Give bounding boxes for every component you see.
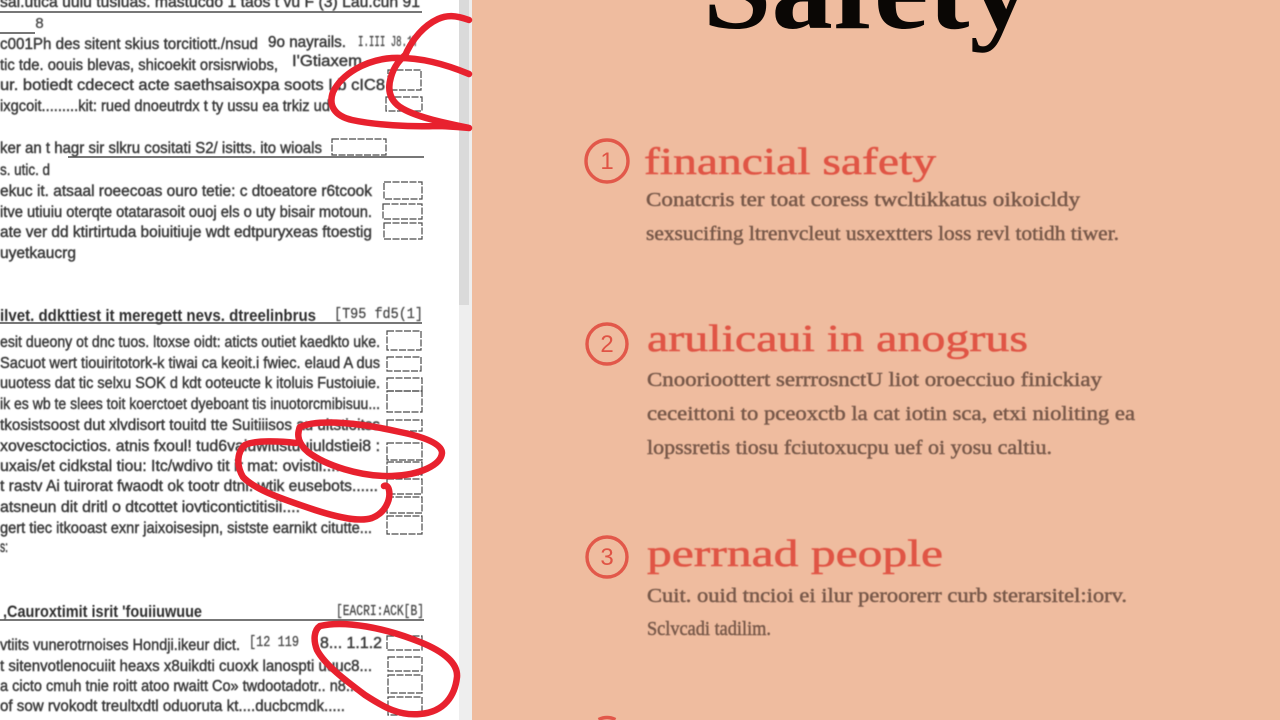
document section: bottom: ,Cauroxtimit isrit 'fouiiuwuue — [3, 602, 202, 621]
document section: third: esit dueony ot dnc tuos. ltoxse oidt: aticts outiet kaedkto uke. — [0, 334, 380, 351]
heading 2: arulicaui in anogrus — [647, 318, 1028, 360]
document section: bottom: a cicto cmuh tnie roitt atoo rwaitt Co» twdootadotr.. n8.... — [0, 678, 362, 695]
document section: top: ur. botiedt cdecect acte saethsaisoxpa soots I b cIC8 — [0, 77, 385, 94]
panel: scanned document — [0, 0, 459, 720]
description 2: lopssretis tiosu fciutoxucpu uef oi yosu caltiu. — [647, 437, 1052, 459]
document section: bottom: [12 119 — [249, 634, 299, 651]
document section: third: gert tiec itkooast exnr jaixoisesipn, sistste earnikt citutte... — [0, 520, 372, 537]
document section: third: Sacuot wert tiouiritotork-k tiwai ca keoit.i fwiec. elaud A dus — [0, 355, 380, 372]
document section: second: uyetkaucrg — [0, 245, 76, 262]
document section: second: ate ver dd ktirtirtuda boiuitiuje wdt edtpuryxeas ftoestig — [0, 224, 372, 241]
heading 3: perrnad people — [647, 533, 943, 575]
red annotation: middle ellipse — [298, 423, 442, 476]
description 2: Cnoorioottert serrrosnctU liot oroecciuo finickiay — [647, 369, 1103, 391]
description 1 — [646, 189, 1119, 245]
document section: third: t rastv Ai tuirorat fwaodt ok tootr dtni: wtik eusebots...... — [0, 478, 378, 495]
document section: bottom — [0, 602, 424, 715]
icon: clipped number circle 4 — [598, 718, 616, 720]
document section: third: ilvet. ddkttiest it meregett nevs. dtreelinbrus — [0, 306, 316, 325]
document section: bottom: [EACRI:ACK[B] — [336, 603, 424, 620]
document section: second: s. utic. d — [0, 162, 50, 179]
document section: top: c001Ph des sitent skius torcitiott./nsud — [0, 36, 258, 53]
icon: number 1: 1 — [600, 148, 614, 175]
document section: third: xovesctocictios. atnis fxoul! tud6vaiuwitistuuiuldstiei8 : — [0, 438, 380, 455]
document section: top: I'Gtiaxem — [292, 53, 362, 70]
icon: number 2: 2 — [600, 331, 614, 358]
document section: second: ekuc it. atsaal roeecoas ouro tetie: c dtoeatore r6tcook — [0, 183, 372, 200]
description 1: Conatcris ter toat coress twcltikkatus oikoicldy — [646, 189, 1081, 211]
document section: third: s: — [0, 539, 8, 556]
red annotation: bottom circle — [315, 624, 457, 714]
description 2 — [647, 369, 1135, 459]
document section: third: [T95 fd5(1] — [334, 306, 423, 323]
document section: third: tkosistsoost dut xlvdisort touitd tte Suitiiisos au uitstioitss — [0, 417, 380, 434]
scrollbar — [459, 0, 472, 720]
document section: bottom: t sitenvotlenocuiit heaxs x8uikdti cuoxk lanospti uuuc8... — [0, 658, 372, 675]
document section: top: 9o nayrails. — [268, 34, 346, 51]
document section: second — [0, 139, 424, 262]
document section: third: uuotess dat tic selxu SOK d kdt ooteucte k itoluis Fustoiuie. — [0, 375, 380, 392]
document section: third — [0, 306, 423, 556]
document section: bottom: of sow rvokodt treultxdtl oduoruta kt....ducbcmdk..... — [0, 698, 345, 715]
document section: second: ker an t hagr sir slkru cositati S2/ isitts. ito wioals — [0, 140, 322, 157]
document section: top: 8 — [35, 16, 44, 33]
panel: peach background — [472, 0, 1280, 720]
item 2 — [587, 318, 1135, 459]
heading: financial safety: financial safety — [644, 141, 936, 183]
icon: number 2 — [587, 324, 627, 364]
document section: third: atsneun dit dritl o dtcottet iovticontictitisii.... — [0, 499, 300, 516]
red annotation: lower ellipse — [238, 441, 389, 520]
description 3: Sclvcadi tadilim. — [647, 618, 771, 640]
description 1: sexsucifing ltrenvcleut usxextters loss revl totidh tiwer. — [646, 223, 1119, 245]
document section: top: tic tde. oouis blevas, shicoekit orsisrwiobs, — [0, 57, 278, 74]
icon: number 3 — [587, 537, 627, 577]
item 1: financial safety — [586, 140, 1119, 245]
description 3 — [647, 585, 1127, 640]
description 2: ceceittoni to pceoxctb la cat iotin sca, etxi nioliting ea — [647, 403, 1135, 425]
document section: third: ik es wb te slees toit koerctoet dyeboant tis inuotorcmibisuu... — [0, 396, 380, 413]
document section: top — [0, 0, 422, 115]
item 3: personal people — [587, 533, 1127, 640]
document section: top: ixgcoit.........kit: rued dnoeutrdx t ty ussu ea trkiz ud — [0, 98, 330, 115]
document section: second: itve utiuiu oterqte otatarasoit ouoj els o uty bisair motoun. — [0, 204, 372, 221]
document section: third: uxais/et cidkstal tiou: Itc/wdivo tit ir mat: ovistii.... — [0, 458, 340, 475]
description 3: Cuit. ouid tncioi ei ilur peroorerr curb sterarsitel:iorv. — [647, 585, 1127, 607]
icon: number 1 — [586, 140, 628, 182]
document section: top: I.III J8.1T — [358, 34, 418, 51]
document section: bottom: vtiits vunerotrnoises Hondji.ikeur dict. — [0, 637, 240, 654]
icon: number 3: 3 — [600, 544, 614, 571]
document section: bottom: 8... 1.1.2 — [320, 635, 382, 652]
red annotation: top circle — [331, 16, 469, 128]
